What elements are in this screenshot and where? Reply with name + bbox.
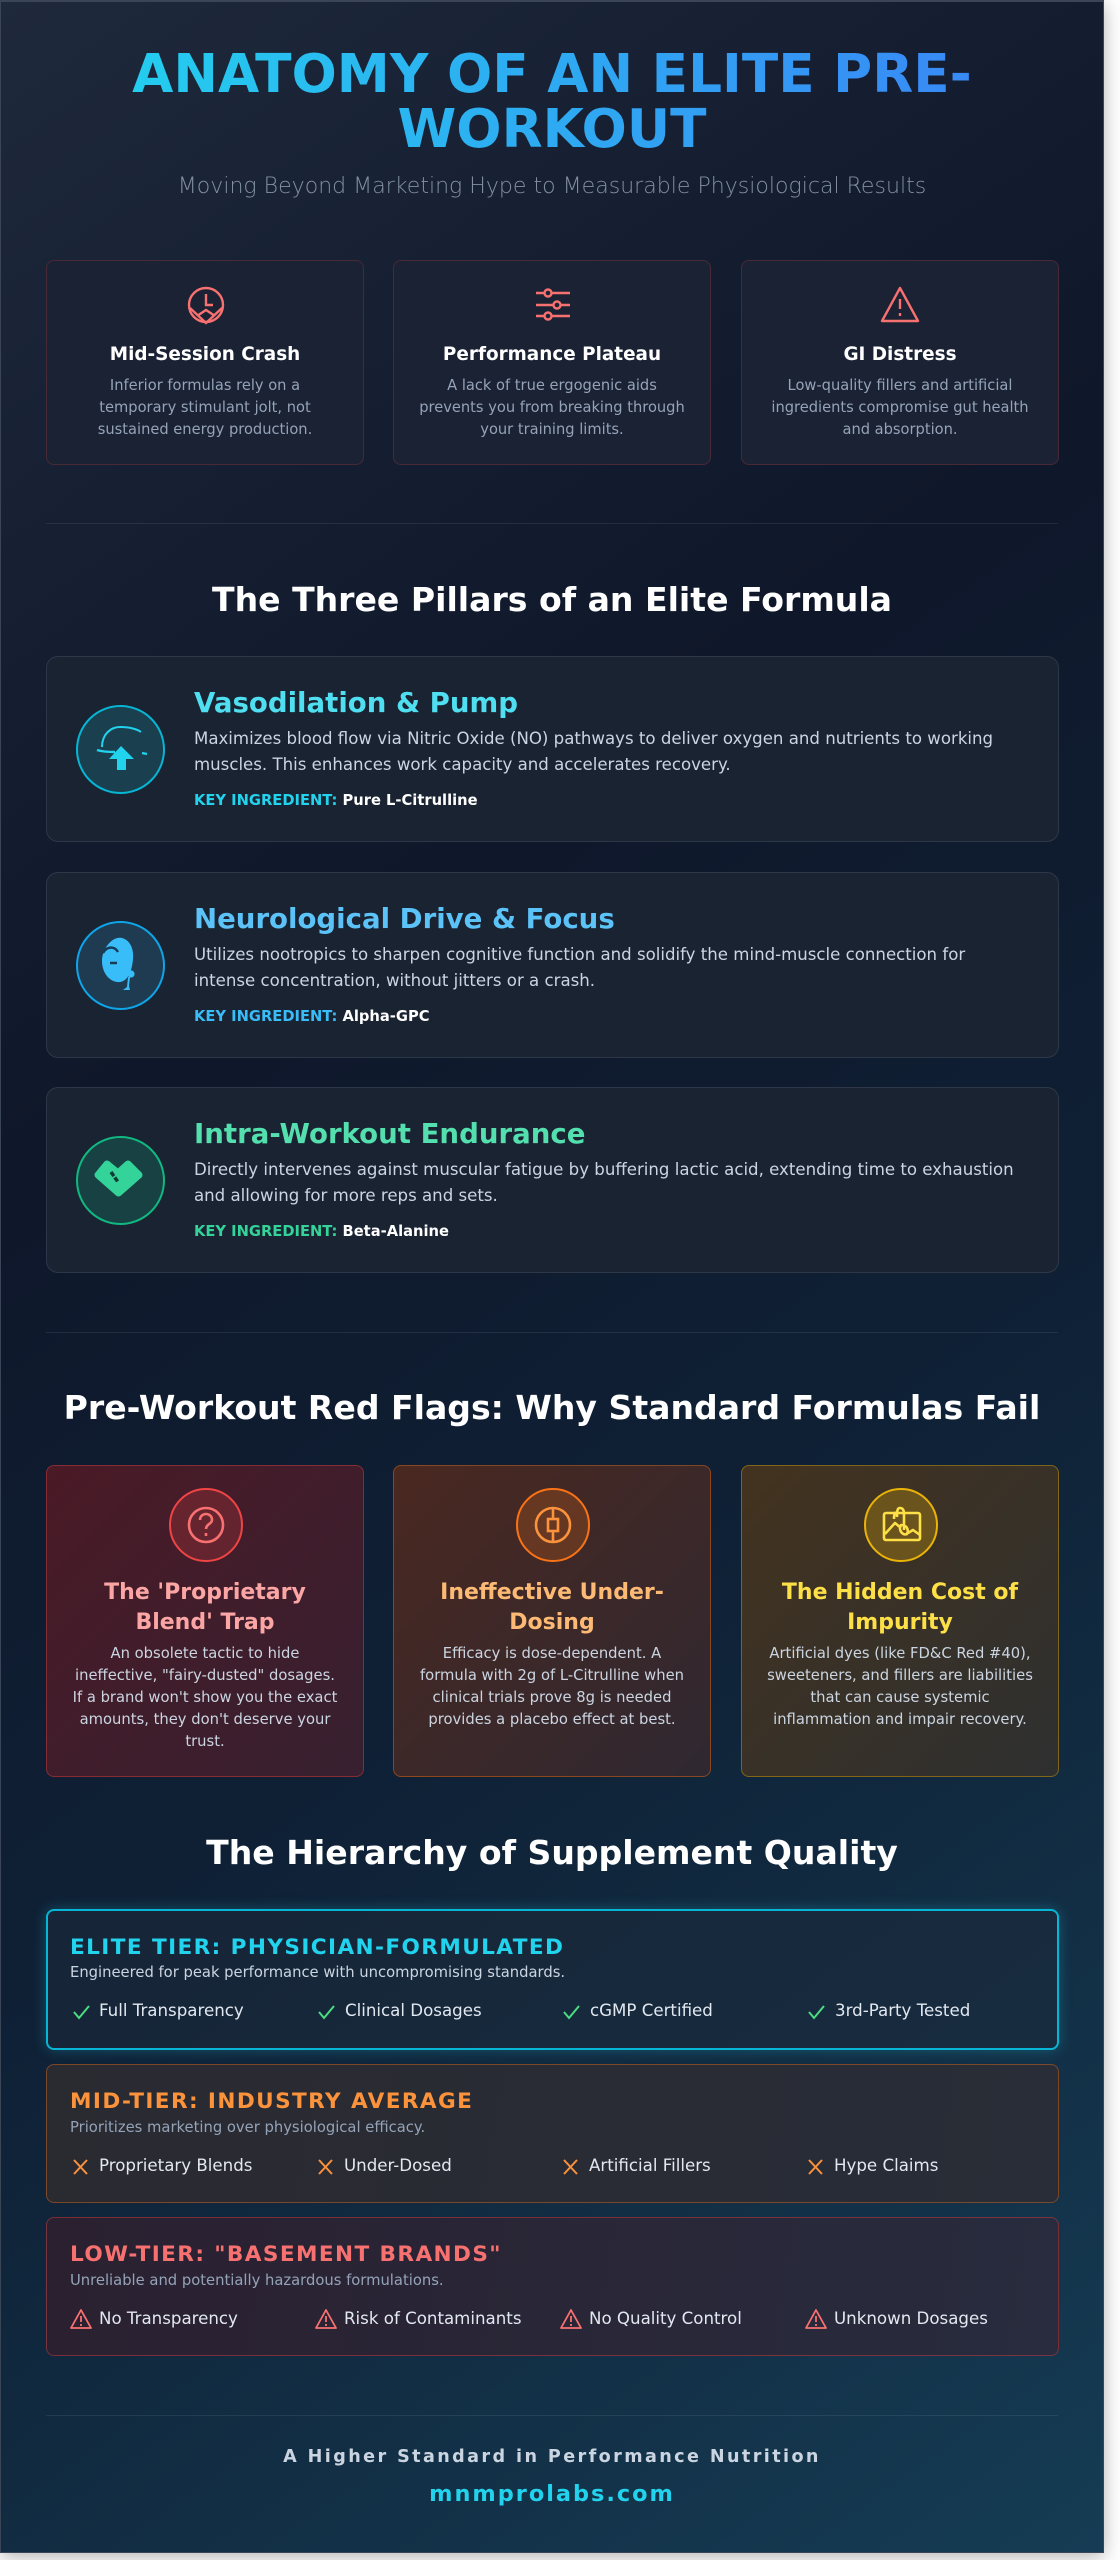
item: 3rd-Party Tested xyxy=(835,2001,970,2020)
panel: performance plateau xyxy=(393,260,711,465)
panel: impurity xyxy=(741,1465,1059,1777)
icon: warning triangle xyxy=(880,286,920,322)
icon: brain head xyxy=(76,921,165,1010)
text: sustained energy production. xyxy=(98,421,312,438)
text: Artificial dyes (like FD&C Red #40), xyxy=(769,1645,1031,1662)
icon: dose scale xyxy=(516,1488,590,1562)
text xyxy=(767,1645,1033,1728)
text xyxy=(194,945,966,990)
text: ingredients compromise gut health xyxy=(771,399,1029,416)
text: provides a placebo effect at best. xyxy=(428,1711,676,1728)
title xyxy=(46,47,1058,157)
item: No Transparency xyxy=(99,2309,238,2328)
text: muscles. This enhances work capacity and accelerates recovery. xyxy=(194,755,731,774)
heading: Mid-Session Crash xyxy=(110,344,300,365)
heading xyxy=(440,1580,664,1634)
footer url: mnmprolabs.com xyxy=(429,2481,675,2507)
panel: proprietary blend xyxy=(46,1465,364,1777)
text xyxy=(771,377,1029,438)
text xyxy=(194,1160,1014,1205)
text: A lack of true ergogenic aids xyxy=(447,377,657,394)
text xyxy=(73,1645,338,1750)
heading: GI Distress xyxy=(843,344,957,365)
panel: elite tier xyxy=(46,1909,1059,2050)
heading: three pillars: The Three Pillars of an Elite Formula xyxy=(212,580,892,619)
heading: Vasodilation & Pump xyxy=(194,686,518,718)
text: Utilizes nootropics to sharpen cognitive function and solidify the mind-muscle connection for xyxy=(194,945,965,964)
heading: Neurological Drive & Focus xyxy=(194,902,615,934)
icon: pump arrow xyxy=(76,705,165,794)
tier description: Unreliable and potentially hazardous formulations. xyxy=(70,2272,444,2289)
icon: clock xyxy=(188,286,224,324)
heading: The Hidden Cost of xyxy=(782,1580,1018,1605)
heading xyxy=(782,1580,1018,1634)
heading: Dosing xyxy=(509,1610,595,1634)
icon: impurity image xyxy=(864,1488,938,1562)
item: Risk of Contaminants xyxy=(344,2309,522,2328)
heading: red flags: Pre-Workout Red Flags: Why Standard Formulas Fail xyxy=(64,1388,1040,1427)
heading: Impurity xyxy=(847,1610,953,1634)
item: Artificial Fillers xyxy=(589,2156,711,2175)
panel: GI distress xyxy=(741,260,1059,465)
panel: mid tier xyxy=(46,2064,1059,2203)
panel: vasodilation xyxy=(46,656,1059,842)
text: Efficacy is dose-dependent. A xyxy=(443,1645,661,1662)
text: trust. xyxy=(185,1733,225,1750)
panel: under-dosing xyxy=(393,1465,711,1777)
text: Low-quality fillers and artificial xyxy=(788,377,1012,394)
panel: mid-session crash xyxy=(46,260,364,465)
key ingredient: KEY INGREDIENT: Pure L-Citrulline xyxy=(194,792,478,809)
text: An obsolete tactic to hide xyxy=(111,1645,299,1662)
heading: Blend' Trap xyxy=(135,1610,275,1634)
text: Directly intervenes against muscular fatigue by buffering lactic acid, extending time to exhaustion xyxy=(194,1160,1014,1179)
tier description: Prioritizes marketing over physiological efficacy. xyxy=(70,2119,425,2136)
text: your training limits. xyxy=(480,421,624,438)
item: cGMP Certified xyxy=(590,2001,713,2020)
text: and allowing for more reps and sets. xyxy=(194,1186,498,1205)
item: Proprietary Blends xyxy=(99,2156,252,2175)
heading xyxy=(104,1580,306,1634)
key ingredient: KEY INGREDIENT: Beta-Alanine xyxy=(194,1223,449,1240)
title: WORKOUT xyxy=(398,98,706,160)
text: intense concentration, without jitters or a crash. xyxy=(194,971,595,990)
text: prevents you from breaking through xyxy=(419,399,685,416)
icon: sliders xyxy=(536,288,570,321)
key ingredient: KEY INGREDIENT: Alpha-GPC xyxy=(194,1008,430,1025)
item: Unknown Dosages xyxy=(834,2309,988,2328)
text xyxy=(98,377,312,438)
item: Under-Dosed xyxy=(344,2156,452,2175)
text: If a brand won't show you the exact xyxy=(73,1689,337,1706)
text: amounts, they don't deserve your xyxy=(80,1711,330,1728)
text: inflammation and impair recovery. xyxy=(773,1711,1027,1728)
item: Hype Claims xyxy=(834,2156,938,2175)
text: ineffective, "fairy-dusted" dosages. xyxy=(75,1667,335,1684)
tier heading: ELITE TIER: PHYSICIAN-FORMULATED xyxy=(70,1935,564,1960)
text: temporary stimulant jolt, not xyxy=(99,399,311,416)
heading: Performance Plateau xyxy=(443,344,661,365)
icon: heart xyxy=(76,1136,165,1225)
subtitle: Moving Beyond Marketing Hype to Measurable Physiological Results xyxy=(178,174,926,199)
item: Full Transparency xyxy=(99,2001,244,2020)
item: No Quality Control xyxy=(589,2309,742,2328)
text: formula with 2g of L-Citrulline when xyxy=(420,1667,684,1684)
text: sweeteners, and fillers are liabilities xyxy=(767,1667,1033,1684)
tier heading: LOW-TIER: "BASEMENT BRANDS" xyxy=(70,2242,502,2267)
text xyxy=(420,1645,684,1728)
tier heading: MID-TIER: INDUSTRY AVERAGE xyxy=(70,2089,473,2114)
text xyxy=(419,377,685,438)
text xyxy=(194,729,993,774)
panel: neurological xyxy=(46,872,1059,1058)
heading: Ineffective Under- xyxy=(440,1580,664,1605)
text: and absorption. xyxy=(842,421,958,438)
text: Maximizes blood flow via Nitric Oxide (NO) pathways to deliver oxygen and nutrients to working xyxy=(194,729,993,748)
icon: question xyxy=(168,1488,242,1562)
title: ANATOMY OF AN ELITE PRE- xyxy=(132,43,972,105)
panel: endurance xyxy=(46,1087,1059,1273)
panel: low tier xyxy=(46,2217,1059,2356)
text: Inferior formulas rely on a xyxy=(110,377,300,394)
item: Clinical Dosages xyxy=(345,2001,482,2020)
footer tagline: A Higher Standard in Performance Nutrition xyxy=(283,2447,821,2467)
text: that can cause systemic xyxy=(810,1689,990,1706)
text: clinical trials prove 8g is needed xyxy=(433,1689,671,1706)
tier description: Engineered for peak performance with uncompromising standards. xyxy=(70,1964,565,1981)
heading: hierarchy: The Hierarchy of Supplement Quality xyxy=(206,1833,898,1872)
heading: The 'Proprietary xyxy=(104,1580,306,1605)
heading: Intra-Workout Endurance xyxy=(194,1116,585,1150)
